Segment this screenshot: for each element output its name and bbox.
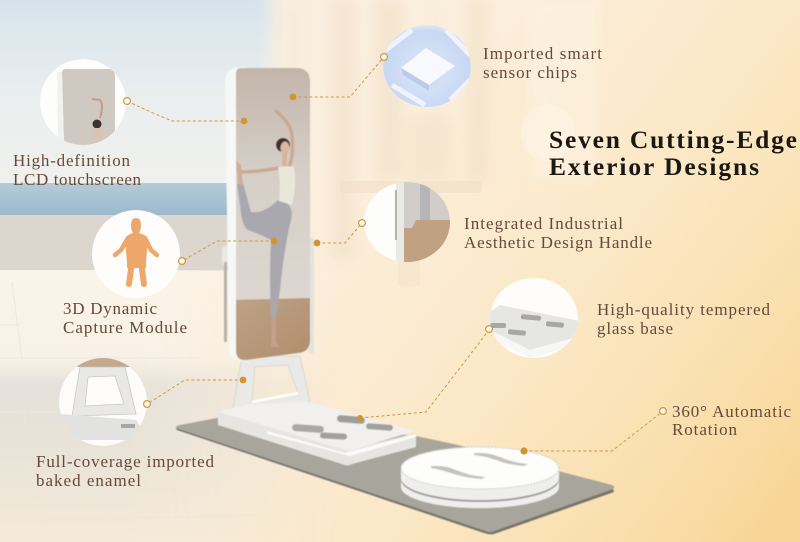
thumbnail: glass base bbox=[490, 278, 580, 358]
thumbnail: chip bbox=[383, 25, 471, 107]
grey floor mat bbox=[176, 416, 614, 534]
callout: design handle bbox=[314, 180, 652, 264]
label bbox=[672, 402, 791, 439]
label: 3D Dynamic bbox=[63, 299, 157, 318]
callout: smart sensor chips bbox=[290, 25, 602, 107]
label bbox=[464, 214, 652, 252]
thumbnail: handle bbox=[364, 180, 450, 264]
callout: 3D capture module bbox=[63, 210, 277, 337]
thumbnail: enamel stand bbox=[59, 358, 150, 446]
label: Rotation bbox=[672, 420, 738, 439]
leader line bbox=[317, 223, 362, 243]
callout: automatic rotation bbox=[520, 402, 791, 455]
label bbox=[13, 151, 142, 189]
leader line bbox=[147, 380, 243, 404]
white glass base bbox=[218, 402, 416, 465]
label: Integrated Industrial bbox=[464, 214, 623, 233]
leader line bbox=[360, 330, 489, 418]
thumbnail: body scan figure bbox=[92, 210, 180, 298]
label: Full-coverage imported bbox=[36, 452, 214, 471]
thumbnail: LCD screen bbox=[40, 59, 126, 145]
leader line bbox=[524, 412, 662, 451]
turntable disc bbox=[401, 447, 559, 508]
label: Aesthetic Design Handle bbox=[464, 233, 652, 252]
mirror body bbox=[225, 67, 246, 361]
label: 360° Automatic bbox=[672, 402, 791, 421]
leader line bbox=[182, 241, 274, 261]
mirror screen with yoga figure bbox=[236, 68, 310, 361]
label: sensor chips bbox=[483, 63, 577, 82]
figure: legs bbox=[237, 183, 292, 347]
label: baked enamel bbox=[36, 471, 141, 490]
label: Capture Module bbox=[63, 318, 187, 337]
figure: head bbox=[276, 138, 290, 166]
callout: tempered glass base bbox=[357, 278, 770, 421]
label bbox=[483, 44, 602, 82]
label: glass base bbox=[597, 319, 673, 338]
callout: LCD touchscreen bbox=[13, 59, 247, 189]
label bbox=[63, 299, 187, 337]
title: Seven Cutting-Edge bbox=[549, 125, 797, 154]
label bbox=[597, 300, 770, 338]
label: Imported smart bbox=[483, 44, 602, 63]
label bbox=[36, 452, 214, 490]
callout: baked enamel bbox=[36, 358, 246, 490]
leader line bbox=[127, 101, 244, 121]
product: rotating mirror device bbox=[176, 66, 614, 534]
mirror side handle bbox=[222, 238, 314, 353]
title: Exterior Designs bbox=[549, 152, 759, 181]
stand frame bbox=[232, 356, 310, 416]
title bbox=[549, 125, 797, 181]
label: High-definition bbox=[13, 151, 130, 170]
label: High-quality tempered bbox=[597, 300, 770, 319]
leader line bbox=[293, 57, 384, 97]
figure: torso bbox=[278, 166, 295, 205]
figure: arms bbox=[240, 111, 293, 172]
label: LCD touchscreen bbox=[13, 170, 142, 189]
